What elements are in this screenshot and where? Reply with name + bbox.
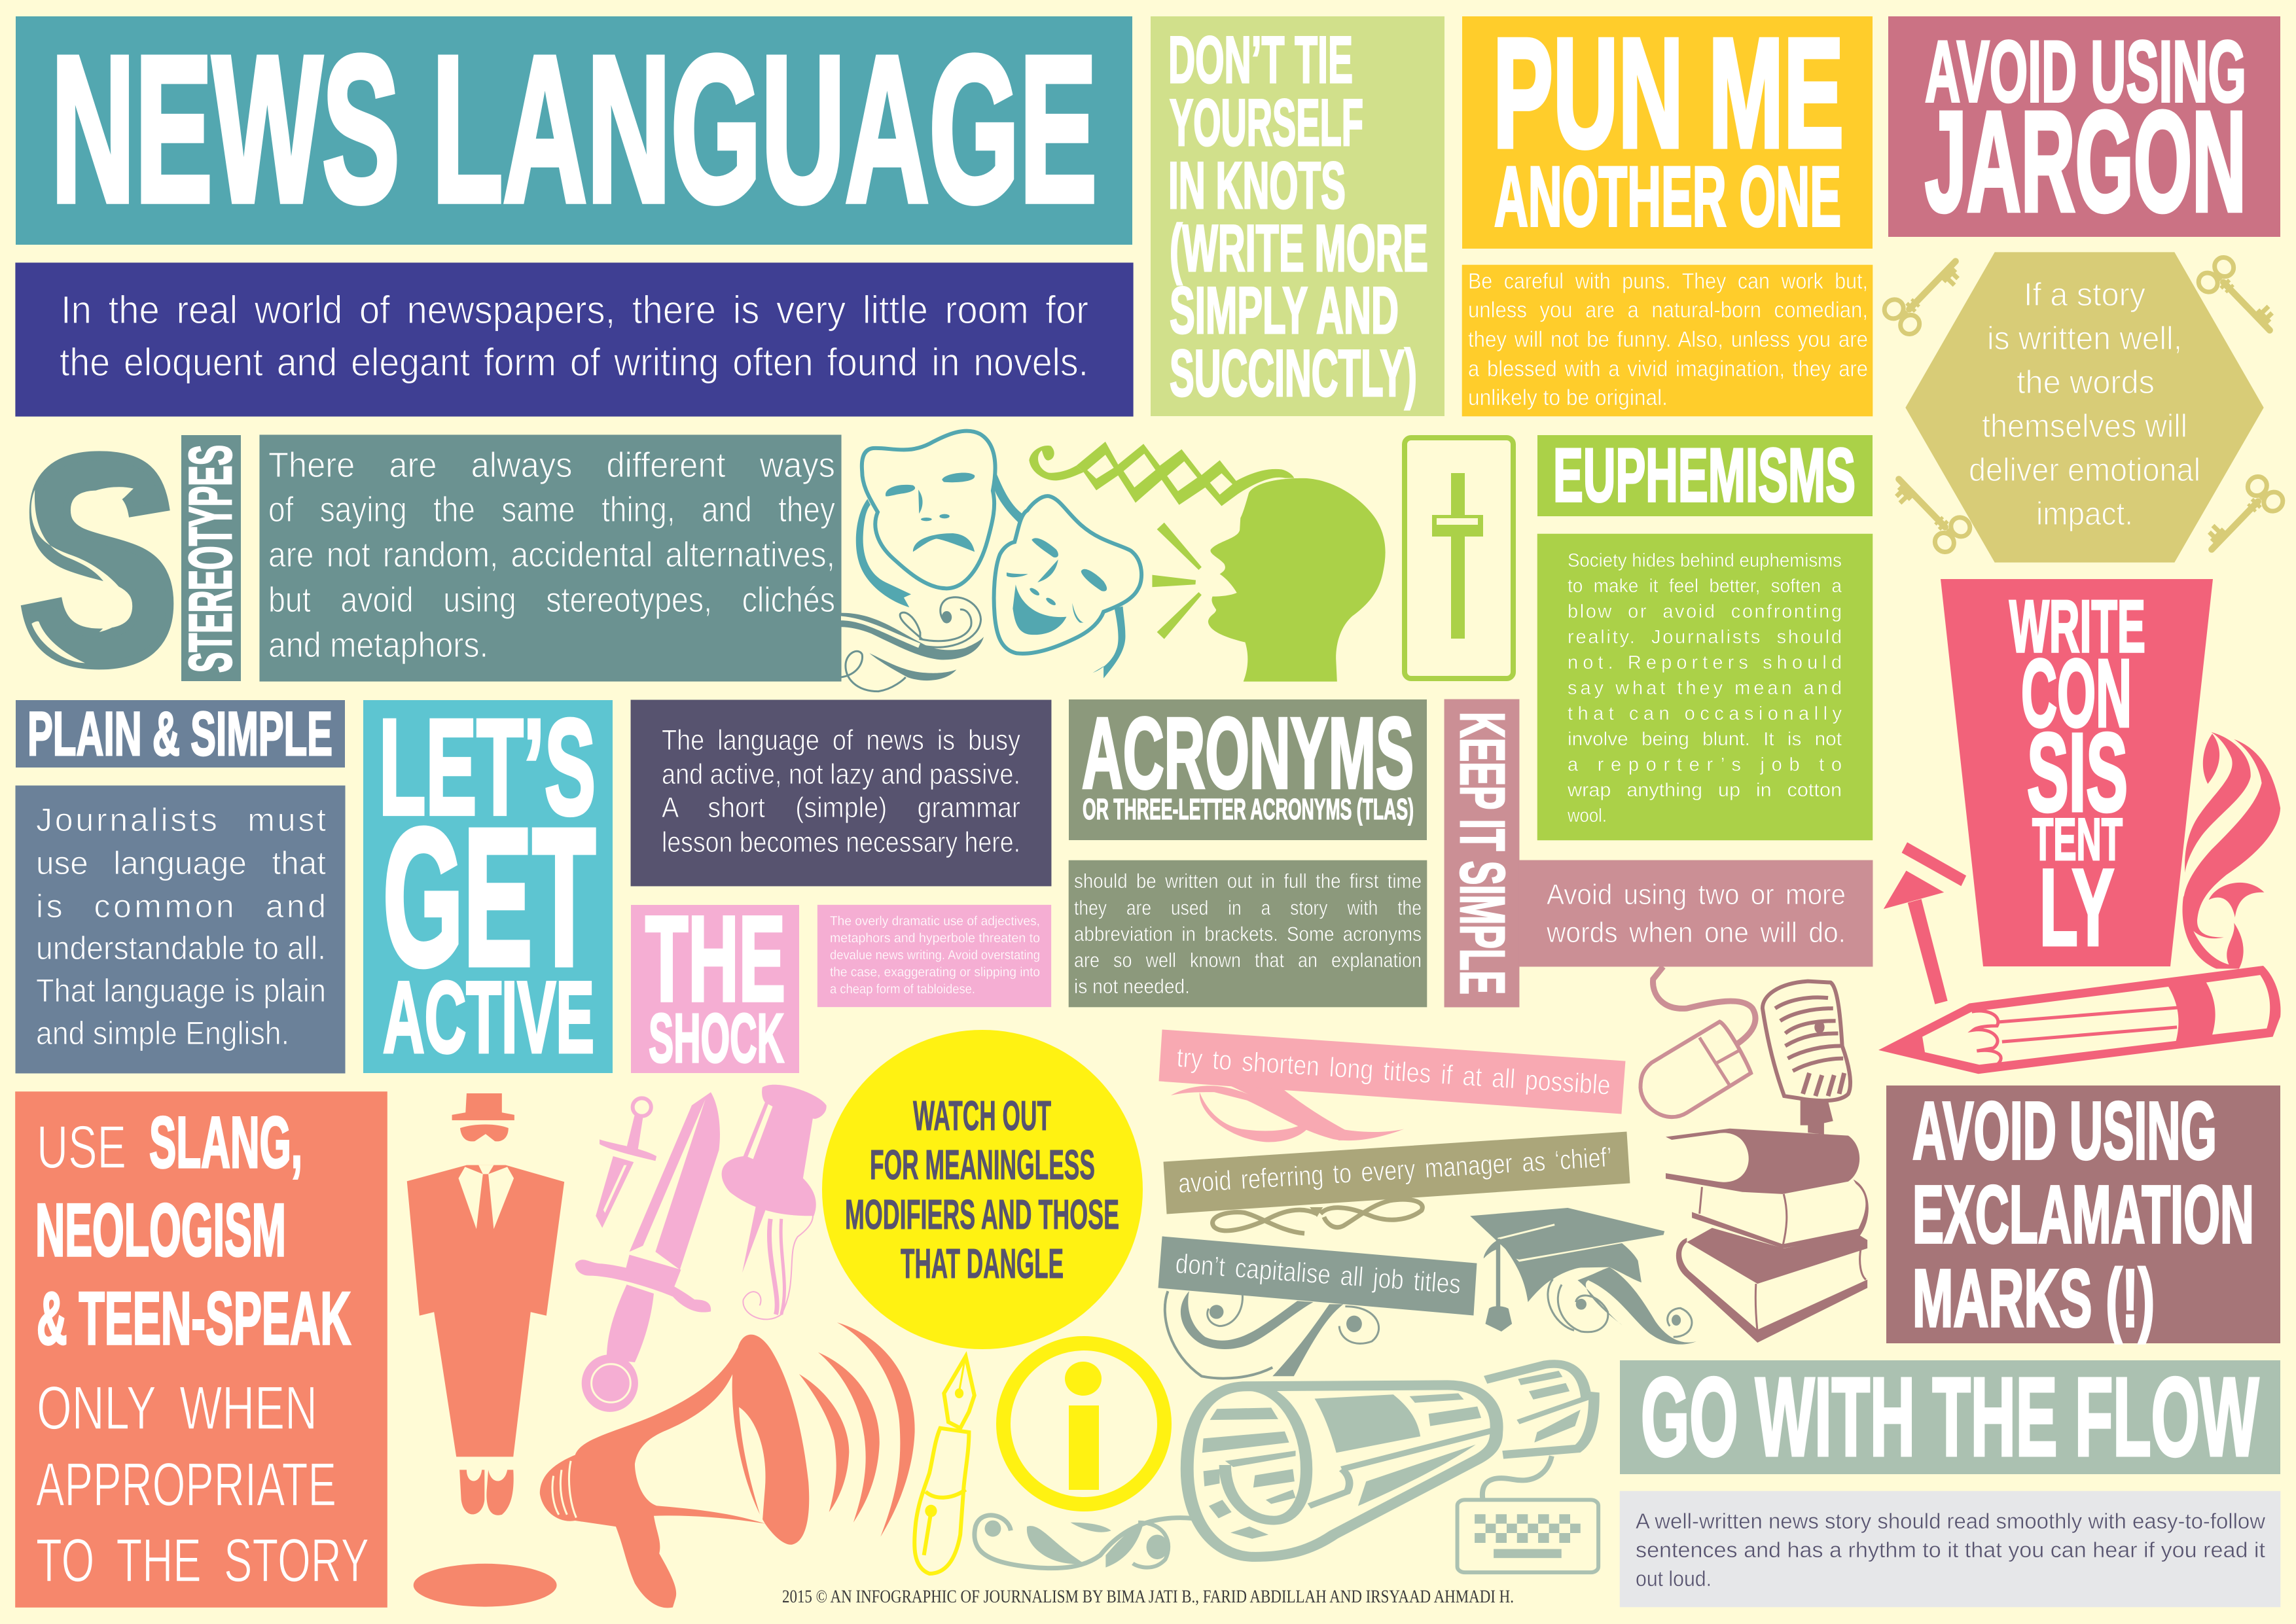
text panel: euphemisms: wrap anything up in cotton — [1567, 780, 1842, 801]
heading panel: acronyms: OR THREE-LETTER ACRONYMS (TLAS) — [1083, 792, 1414, 826]
panel: don't tie yourself in knots: YOURSELF — [1170, 86, 1363, 160]
heading: stereotypes: STEREOTYPES — [177, 445, 244, 673]
icon: suited spy figure — [407, 1093, 564, 1607]
heading panel: plain and simple — [16, 699, 345, 769]
icon: rolled newspaper — [1187, 1364, 1594, 1557]
text panel: language of news: A short (simple) grammar — [662, 792, 1020, 824]
text panel: euphemisms: Society hides behind euphemisms — [1568, 550, 1842, 571]
banner: capitalise: don’t capitalise all job titles — [1174, 1248, 1462, 1299]
stereotypes text panel — [260, 435, 841, 681]
text panel: go with the flow — [1620, 1491, 2280, 1607]
text panel: puns: Be careful with puns. They can work but, — [1468, 269, 1868, 294]
text panel: journalists: understandable to all. — [36, 930, 326, 966]
hexagon callout: impact. — [2036, 495, 2133, 532]
text panel: journalists: and simple English. — [36, 1015, 289, 1051]
panel: keep it simple: KEEP IT SIMPLE — [1447, 712, 1517, 995]
panel: keep it simple: Avoid using two or more — [1547, 879, 1846, 911]
text panel: puns: a blessed with a vivid imagination, they are — [1468, 357, 1868, 381]
heading panel: the shock: THE — [645, 892, 785, 1027]
heading panel: the shock — [631, 892, 799, 1077]
hexagon callout: is written well, — [1987, 320, 2182, 357]
panel: use slang: ONLY WHEN — [37, 1373, 317, 1442]
text panel: euphemisms — [1537, 534, 1873, 840]
text panel: acronyms: should be written out in full the first time — [1074, 870, 1422, 892]
callout circle: modifiers: FOR MEANINGLESS — [870, 1141, 1095, 1188]
icon: teal flourish — [1165, 1291, 1379, 1379]
icon: speaking head with zigzag — [1029, 442, 1386, 682]
banner: manager chief: avoid referring to every manager as ‘chief’ — [1177, 1142, 1613, 1199]
heading panel: pun me another one: ANOTHER ONE — [1494, 149, 1841, 244]
icon: flourish beneath masks — [841, 597, 984, 692]
title panel: News Language: NEWS LANGUAGE — [51, 13, 1097, 245]
text panel: journalists — [16, 786, 345, 1073]
panel: use slang: USE — [37, 1113, 126, 1181]
panel: use slang: & TEEN-SPEAK — [37, 1277, 351, 1360]
text panel: acronyms — [1069, 860, 1427, 1007]
panel: write consistently: LY — [2039, 847, 2114, 968]
text panel: euphemisms: to make it feel better, soften a — [1568, 576, 1842, 597]
heading panel: let's get active: GET — [383, 788, 596, 1006]
heading panel: the shock: SHOCK — [649, 1000, 784, 1077]
icon: botanical swirl — [975, 1515, 1193, 1568]
heading panel: avoid using jargon — [1888, 16, 2280, 241]
icon: flame flourish — [2183, 732, 2280, 969]
heading panel: acronyms — [1069, 697, 1427, 840]
heading panel: pun me another one: PUN ME — [1493, 7, 1844, 180]
panel: write consistently: CON — [2021, 640, 2132, 747]
text panel: acronyms: they are used in a story with the — [1074, 896, 1422, 919]
panel: don't tie yourself in knots: DON’T TIE — [1168, 24, 1353, 97]
text panel: language of news: lesson becomes necessary here. — [662, 826, 1020, 858]
text panel: euphemisms: involve being blunt. It is not — [1568, 729, 1842, 750]
heading panel: euphemisms — [1537, 432, 1873, 518]
text panel: euphemisms: wool. — [1567, 805, 1607, 826]
panel: use slang: APPROPRIATE — [36, 1450, 336, 1519]
icon: keyboard — [1458, 1456, 1598, 1572]
text panel: go with the flow: A well-written news story should read smoothly with easy-to-follow — [1636, 1509, 2265, 1533]
panel: don't tie yourself in knots: (WRITE MORE — [1170, 212, 1428, 285]
callout circle: modifiers: MODIFIERS AND THOSE — [845, 1191, 1119, 1238]
panel: use slang: NEOLOGISM — [35, 1189, 286, 1272]
banner: manager chief — [1164, 1132, 1630, 1214]
text panel: puns: unless you are a natural-born comedian, — [1468, 298, 1868, 323]
decorative letter S: S — [18, 395, 179, 725]
panel: use slang — [16, 1092, 387, 1607]
text panel: acronyms: is not needed. — [1074, 975, 1190, 998]
icon: megaphone sound waves — [799, 1322, 915, 1537]
intro panel: the eloquent and elegant form of writing often found in novels. — [60, 340, 1088, 384]
text panel: acronyms: are so well known that an explanation — [1074, 949, 1422, 972]
text panel: the shock: devalue news writing. Avoid overstating — [830, 948, 1040, 962]
credit line: 2015 © AN INFOGRAPHIC OF JOURNALISM BY BIMA JATI B., FARID ABDILLAH AND IRSYAAD AHMADI H. — [782, 1587, 1514, 1607]
title panel: News Language — [16, 13, 1132, 245]
text panel: euphemisms: blow or avoid confronting — [1568, 601, 1842, 622]
text panel: journalists: use language that — [36, 845, 326, 881]
icon: slider — [1405, 438, 1513, 679]
hexagon callout — [1906, 253, 2263, 562]
heading: stereotypes — [177, 435, 244, 681]
heading panel: let's get active — [363, 692, 613, 1074]
callout circle: modifiers: THAT DANGLE — [901, 1240, 1064, 1287]
heading panel: let's get active: ACTIVE — [383, 961, 594, 1074]
intro panel: In the real world of newspapers, there is very little room for — [61, 288, 1088, 332]
heading panel: euphemisms: EUPHEMISMS — [1553, 432, 1856, 518]
text panel: the shock: The overly dramatic use of adjectives, — [830, 914, 1040, 928]
text panel: journalists: is common and — [36, 888, 326, 925]
text panel: language of news: The language of news is busy — [662, 724, 1020, 756]
heading panel: pun me another one — [1462, 7, 1873, 249]
stereotypes text panel: There are always different ways — [268, 446, 835, 485]
icon: pencil — [1878, 966, 2281, 1074]
icon: microphone — [1763, 981, 1850, 1135]
text panel: language of news — [631, 700, 1051, 886]
stereotypes text panel: are not random, accidental alternatives, — [268, 535, 835, 574]
hexagon callout: If a story — [2024, 276, 2145, 313]
panel: write consistently: WRITE — [2009, 585, 2145, 667]
panel: don't tie yourself in knots: SIMPLY AND — [1170, 274, 1399, 347]
hexagon callout: deliver emotional — [1969, 451, 2200, 488]
text panel: go with the flow: sentences and has a rhythm to it that you can hear if you read it — [1636, 1538, 2265, 1562]
panel: don't tie yourself in knots: IN KNOTS — [1168, 149, 1346, 222]
panel: write consistently: SIS — [2027, 711, 2128, 835]
icon: information circle — [1003, 1343, 1164, 1504]
text panel: puns: they will not be funny. Also, unless you are — [1468, 327, 1868, 352]
panel: write consistently — [1941, 579, 2213, 968]
banner: shorten long titles: try to shorten long titles if at all possible — [1175, 1042, 1611, 1101]
icon: theatre masks — [856, 431, 1141, 679]
icon: stack of books — [1666, 1129, 1869, 1343]
icon: arrow and bar — [1884, 842, 1966, 1004]
banner: shorten long titles — [1159, 1030, 1625, 1114]
stereotypes text panel: and metaphors. — [268, 626, 488, 665]
panel: use slang: TO THE STORY — [36, 1526, 369, 1595]
icon: pink flourish — [1171, 1086, 1404, 1142]
text panel: journalists: Journalists must — [36, 802, 326, 838]
icon: daggers — [575, 1092, 720, 1412]
stereotypes text panel: of saying the same thing, and they — [268, 490, 835, 529]
text panel: acronyms: abbreviation in brackets. Some acronyms — [1074, 923, 1422, 945]
text panel: puns: unlikely to be original. — [1468, 385, 1668, 410]
text panel: journalists: That language is plain — [36, 972, 326, 1009]
icon: graduation cap with swirl — [1470, 1208, 1696, 1345]
text panel: the shock — [817, 905, 1051, 1007]
icon: khaki ornament — [1213, 1199, 1422, 1233]
text panel: euphemisms: that can occasionally — [1568, 703, 1842, 724]
callout circle: modifiers: WATCH OUT — [913, 1092, 1051, 1139]
text panel: euphemisms: not. Reporters should — [1568, 652, 1842, 673]
panel: don't tie yourself in knots: SUCCINCTLY) — [1170, 337, 1417, 410]
text panel: language of news: and active, not lazy and passive. — [662, 758, 1020, 790]
panel: keep it simple — [1444, 699, 1873, 1007]
text panel: the shock: the case, exaggerating or slipping into — [830, 965, 1040, 980]
panel: keep it simple: words when one will do. — [1546, 917, 1846, 949]
icon: computer mouse — [1640, 966, 1755, 1117]
icon: push pin — [722, 1085, 827, 1319]
text panel: euphemisms: say what they mean and — [1568, 678, 1842, 699]
heading panel: avoid using exclamation marks — [1886, 1086, 2280, 1344]
stereotypes text panel: but avoid using stereotypes, clichés — [268, 580, 835, 620]
panel: write consistently: TENT — [2032, 807, 2123, 873]
text panel: euphemisms: a reporter’s job to — [1568, 754, 1842, 775]
panel: don't tie yourself in knots — [1151, 16, 1444, 416]
panel: use slang: SLANG, — [149, 1102, 302, 1183]
icon: four keys — [1880, 245, 2287, 566]
hexagon callout: themselves will — [1982, 408, 2187, 444]
heading panel: plain and simple: PLAIN & SIMPLE — [27, 699, 332, 769]
heading panel: let's get active: LET’S — [379, 692, 596, 843]
text panel: puns — [1462, 265, 1873, 416]
icon: megaphone — [540, 1335, 809, 1608]
banner: capitalise — [1158, 1237, 1477, 1315]
heading panel: acronyms: ACRONYMS — [1082, 697, 1414, 809]
text panel: the shock: metaphors and hyperbole threaten to — [830, 931, 1040, 945]
hexagon callout: the words — [2017, 364, 2155, 400]
text panel: euphemisms: reality. Journalists should — [1568, 627, 1842, 648]
text panel: the shock: a cheap form of tabloidese. — [830, 982, 975, 997]
callout circle: modifiers — [822, 1030, 1143, 1349]
intro panel — [16, 263, 1133, 416]
text panel: go with the flow: out loud. — [1636, 1566, 1712, 1591]
icon: fountain pen — [914, 1356, 975, 1574]
